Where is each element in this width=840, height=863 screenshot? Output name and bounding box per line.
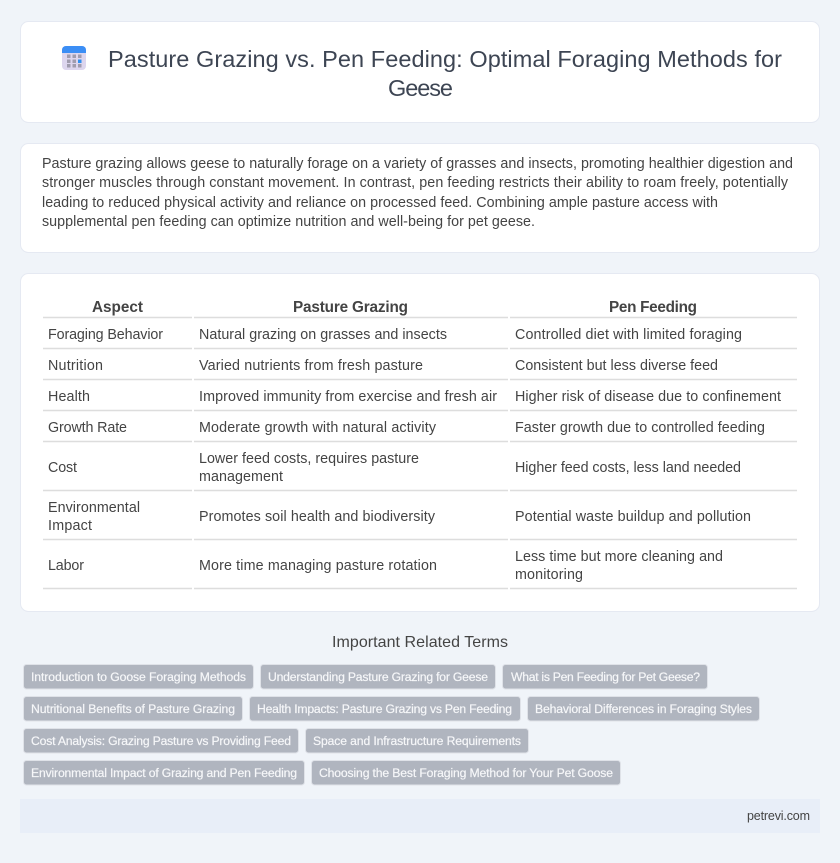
intro text: leading to reduced physical activity and reliance on processed feed. Combining ample pasture access with xyxy=(42,195,718,211)
row: health: Higher risk of disease due to confinement xyxy=(515,389,781,405)
tag xyxy=(260,664,496,689)
tag: What is Pen Feeding for Pet Geese? xyxy=(511,670,700,684)
row: health xyxy=(48,389,781,405)
row: environmental impact xyxy=(48,500,751,534)
tag: Introduction to Goose Foraging Methods xyxy=(31,670,246,684)
related term tags xyxy=(24,664,760,785)
row: nutrition xyxy=(48,358,718,374)
title: Geese xyxy=(388,75,453,101)
tag xyxy=(306,728,528,753)
panel: introduction xyxy=(20,144,820,252)
intro text: supplemental pen feeding can optimize nutrition and well-being for pet geese. xyxy=(42,214,535,230)
intro text: Pasture grazing allows geese to naturally forage on a variety of grasses and insects, promoting healthier digestion and xyxy=(42,156,793,172)
panel: comparison table xyxy=(20,274,820,612)
intro text: stronger muscles through constant movement. In contrast, pen feeding restricts their ability to roam freely, potentially xyxy=(42,175,789,191)
title xyxy=(108,46,782,101)
row: cost: Cost xyxy=(48,460,77,476)
icon: calendar xyxy=(62,46,86,70)
row: labor: Labor xyxy=(48,558,84,574)
table header xyxy=(92,299,697,316)
row: environmental impact: Potential waste buildup and pollution xyxy=(515,509,751,525)
row: labor: More time managing pasture rotation xyxy=(199,558,437,574)
tag: Understanding Pasture Grazing for Geese xyxy=(268,670,488,684)
header panel xyxy=(20,22,820,122)
tag: Space and Infrastructure Requirements xyxy=(313,734,521,748)
row: growth rate: Faster growth due to controlled feeding xyxy=(515,420,765,436)
table header: Pen Feeding xyxy=(609,299,697,316)
row: nutrition: Varied nutrients from fresh pasture xyxy=(199,358,423,374)
footer: petrevi.com xyxy=(747,809,810,823)
tag xyxy=(24,760,304,785)
tag xyxy=(24,696,242,721)
tag xyxy=(24,728,298,753)
tag: Nutritional Benefits of Pasture Grazing xyxy=(31,702,235,716)
heading: important related terms: Important Related Terms xyxy=(332,634,508,651)
tag xyxy=(502,664,708,689)
table header: Aspect xyxy=(92,299,143,316)
row: cost: Higher feed costs, less land needed xyxy=(515,460,741,476)
table header: Pasture Grazing xyxy=(293,299,408,316)
row: cost: management xyxy=(199,469,283,485)
row: health: Improved immunity from exercise and fresh air xyxy=(199,389,497,405)
row: cost xyxy=(48,451,741,485)
tag xyxy=(250,696,520,721)
row: labor: Less time but more cleaning and xyxy=(515,549,723,565)
intro text xyxy=(42,156,793,230)
row: growth rate: Moderate growth with natural activity xyxy=(199,420,437,436)
row: environmental impact: Promotes soil health and biodiversity xyxy=(199,509,436,525)
tag: Choosing the Best Foraging Method for Your Pet Goose xyxy=(319,766,613,780)
row: foraging behavior: Natural grazing on grasses and insects xyxy=(199,327,447,343)
row: labor: monitoring xyxy=(515,567,583,583)
tag: Environmental Impact of Grazing and Pen Feeding xyxy=(31,766,297,780)
tag xyxy=(312,760,620,785)
tag: Health Impacts: Pasture Grazing vs Pen Feeding xyxy=(257,702,512,716)
row: foraging behavior xyxy=(48,327,742,343)
row: cost: Lower feed costs, requires pasture xyxy=(199,451,419,467)
row: foraging behavior: Foraging Behavior xyxy=(48,327,163,343)
row: nutrition: Consistent but less diverse feed xyxy=(515,358,718,374)
tag xyxy=(528,696,760,721)
row: growth rate xyxy=(48,420,765,436)
row: labor xyxy=(48,549,723,583)
row: nutrition: Nutrition xyxy=(48,358,103,374)
row: growth rate: Growth Rate xyxy=(48,420,127,436)
tag: Cost Analysis: Grazing Pasture vs Providing Feed xyxy=(31,734,291,748)
row: foraging behavior: Controlled diet with limited foraging xyxy=(515,327,742,343)
row: environmental impact: Environmental xyxy=(48,500,140,516)
row: environmental impact: Impact xyxy=(48,518,92,534)
footer xyxy=(20,799,820,833)
row: health: Health xyxy=(48,389,90,405)
tag xyxy=(24,664,254,689)
tag: Behavioral Differences in Foraging Styles xyxy=(535,702,752,716)
title: Pasture Grazing vs. Pen Feeding: Optimal Foraging Methods for xyxy=(108,46,782,72)
